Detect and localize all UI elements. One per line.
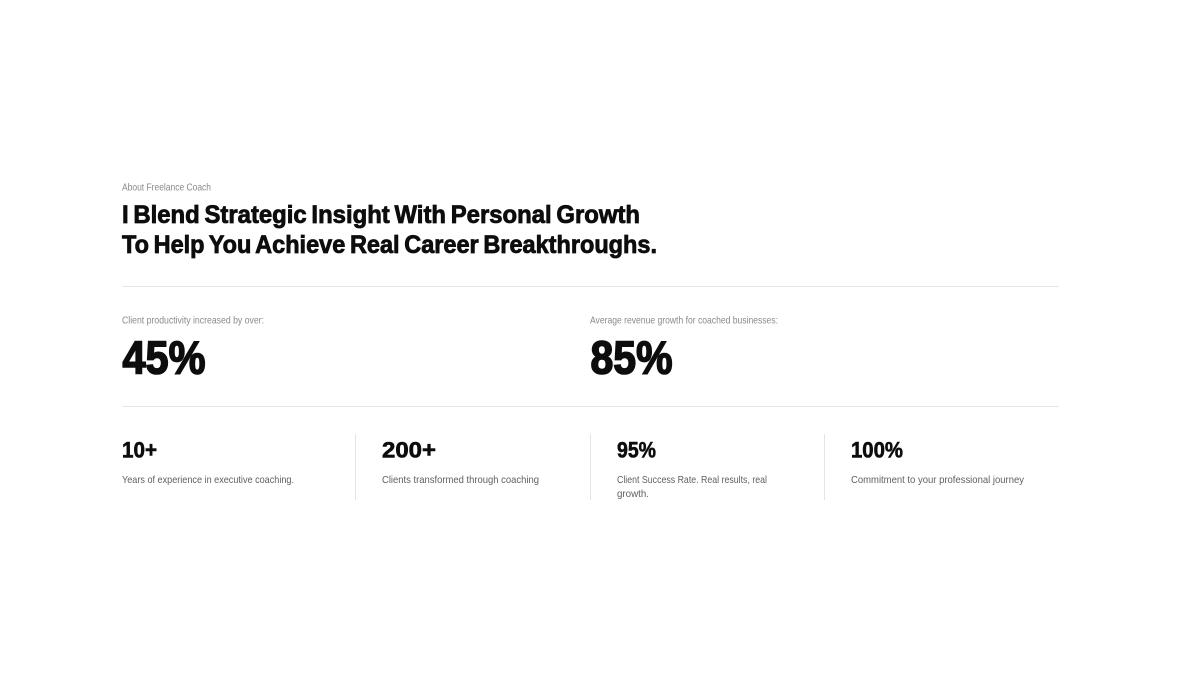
stat: client success rate [617,438,767,500]
stat: clients transformed [382,438,539,486]
stat: client success rate: 95% [617,438,656,462]
main heading: To Help You Achieve Real Career Breakthroughs. [122,231,657,259]
stat: clients transformed: Clients transformed through coaching [382,474,539,486]
eyebrow label: About Freelance Coach [122,182,211,194]
metric: client productivity: 45% [122,332,206,384]
stat: commitment: 100% [851,438,903,462]
stat: client success rate: Client Success Rate. Real results, real [617,474,767,486]
metric: revenue growth [590,316,778,384]
stat: years of experience: 10+ [122,438,157,462]
stat: years of experience: Years of experience in executive coaching. [122,474,294,486]
stat: commitment [851,438,1025,486]
main heading [122,201,657,259]
stat: client success rate: growth. [617,488,649,500]
main heading: I Blend Strategic Insight With Personal Growth [122,201,640,229]
stat: clients transformed: 200+ [382,438,436,462]
stat: commitment: Commitment to your professional journey [851,474,1025,486]
stat: years of experience [122,438,294,486]
metric: revenue growth: Average revenue growth for coached businesses: [590,316,778,326]
metric: client productivity: Client productivity increased by over: [122,316,264,326]
metric: revenue growth: 85% [590,332,672,384]
metric: client productivity [122,316,264,384]
